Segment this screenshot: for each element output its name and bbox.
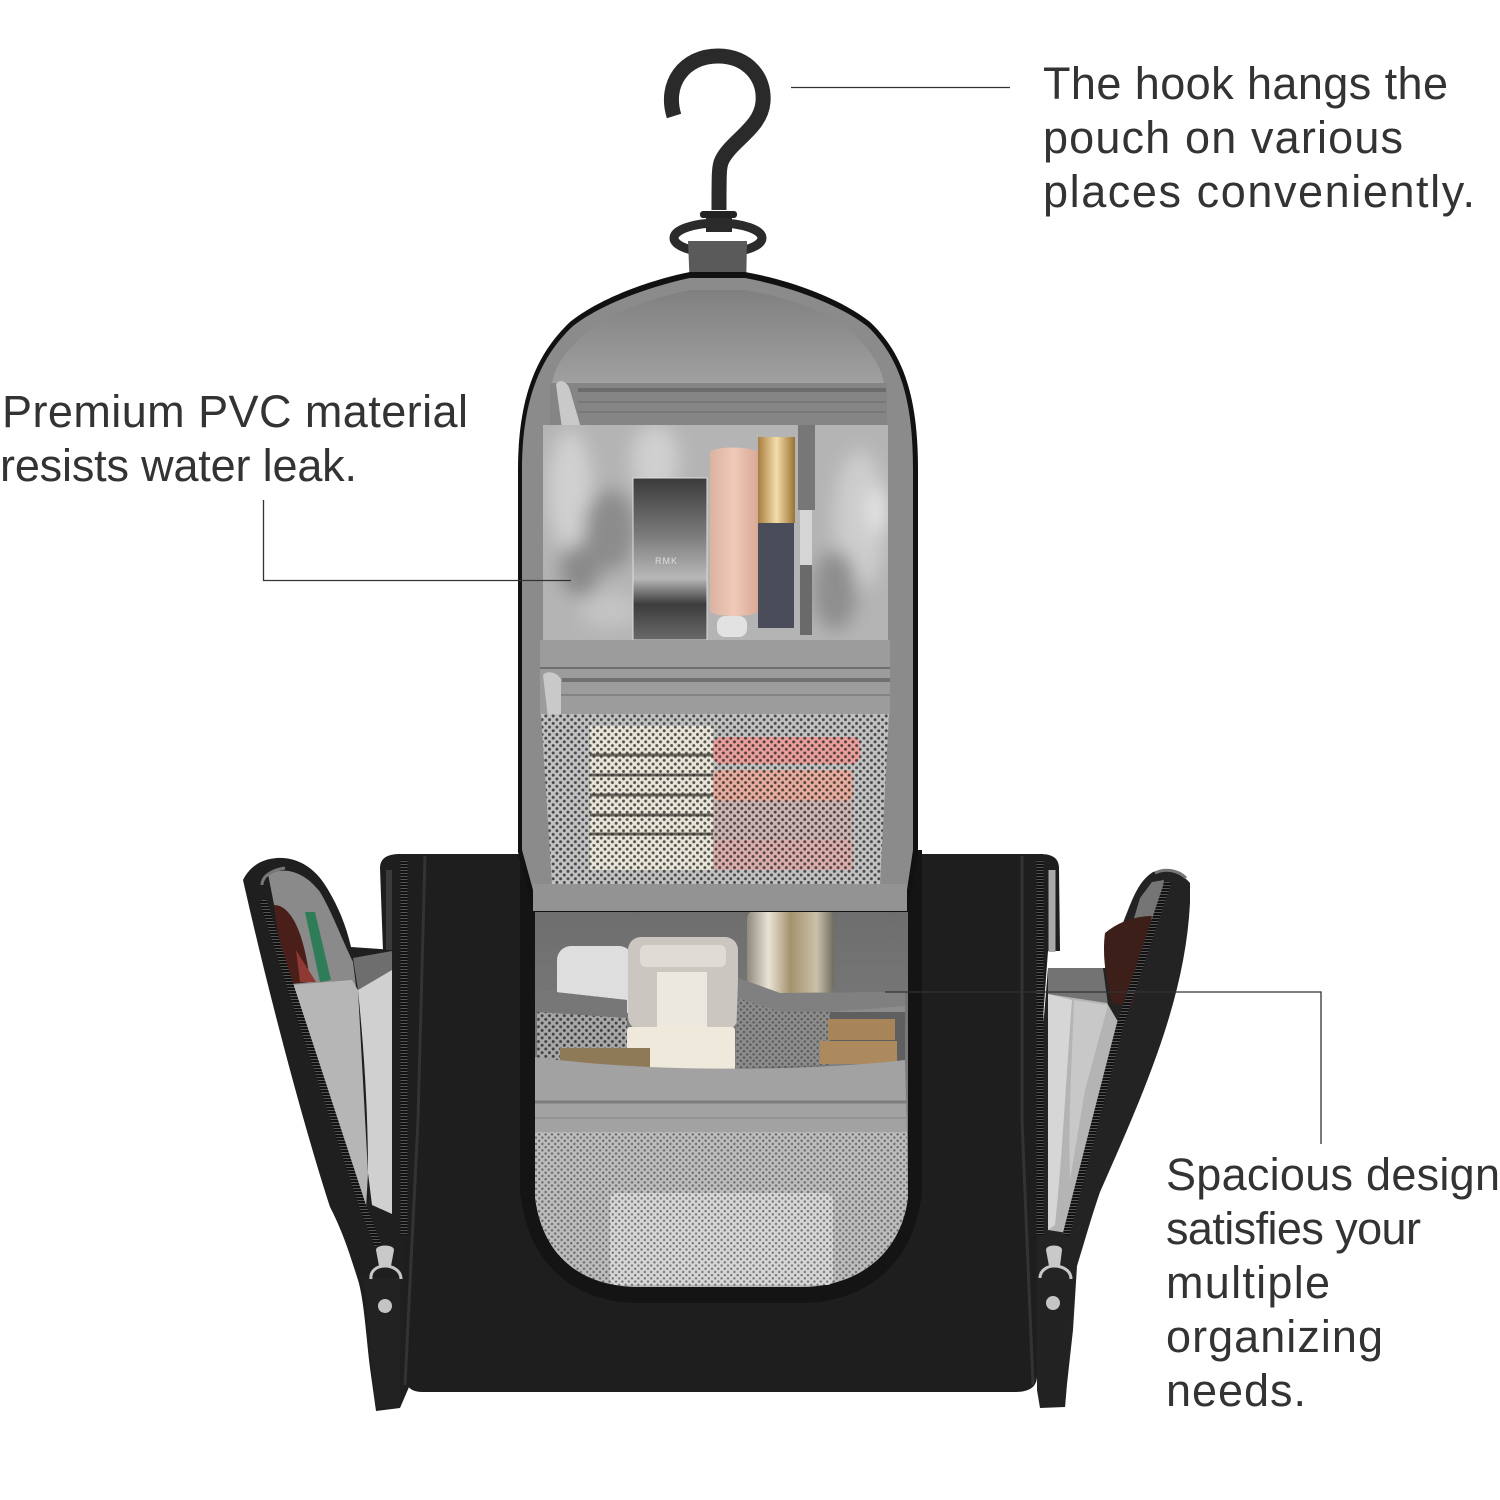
zipper pull top — [556, 381, 581, 432]
bottom band — [533, 884, 907, 911]
zip band — [535, 1057, 907, 1132]
mesh pocket with cards — [541, 714, 889, 884]
lower compartment — [520, 850, 922, 1303]
zip band top — [550, 383, 887, 425]
text: hook callout — [1043, 58, 1475, 217]
text: PVC callout: resists water leak. — [0, 440, 357, 491]
leader line: hook — [791, 86, 1010, 88]
main black body — [380, 854, 1060, 1392]
cosmetics — [557, 910, 834, 1072]
text: spacious callout: organizing — [1166, 1311, 1383, 1362]
zipper pull middle — [543, 672, 561, 725]
small inner pockets — [537, 978, 905, 1070]
left side flap — [243, 858, 412, 1411]
compact mirror: RMK — [655, 556, 678, 566]
strap — [688, 241, 747, 290]
text: spacious callout: multiple — [1166, 1257, 1330, 1308]
leader line: PVC — [264, 500, 571, 580]
eyeliner — [798, 425, 815, 635]
hook — [671, 56, 763, 253]
compact mirror — [633, 478, 707, 640]
upper flap — [518, 272, 918, 912]
hanging toiletry bag — [243, 56, 1190, 1411]
clear PVC pocket — [543, 424, 888, 640]
text: hook callout: The hook hangs the — [1043, 58, 1448, 109]
text: hook callout: pouch on various — [1043, 112, 1403, 163]
mascara — [758, 437, 795, 628]
lipstick — [710, 448, 758, 637]
text: spacious callout: Spacious design — [1166, 1149, 1500, 1200]
text: PVC callout: Premium PVC material — [2, 386, 468, 437]
text: spacious callout: satisfies your — [1166, 1203, 1421, 1254]
leader line: spacious — [885, 992, 1321, 1144]
zip band middle — [540, 640, 890, 714]
right zipper pull — [1040, 1246, 1074, 1407]
text: spacious callout — [1166, 1149, 1500, 1416]
text: hook callout: places conveniently. — [1043, 166, 1475, 217]
front mesh pocket — [535, 1132, 908, 1287]
right side flap — [1037, 870, 1190, 1408]
left zipper pull — [364, 1246, 401, 1408]
text: spacious callout: needs. — [1166, 1365, 1306, 1416]
text: PVC callout — [0, 386, 468, 491]
